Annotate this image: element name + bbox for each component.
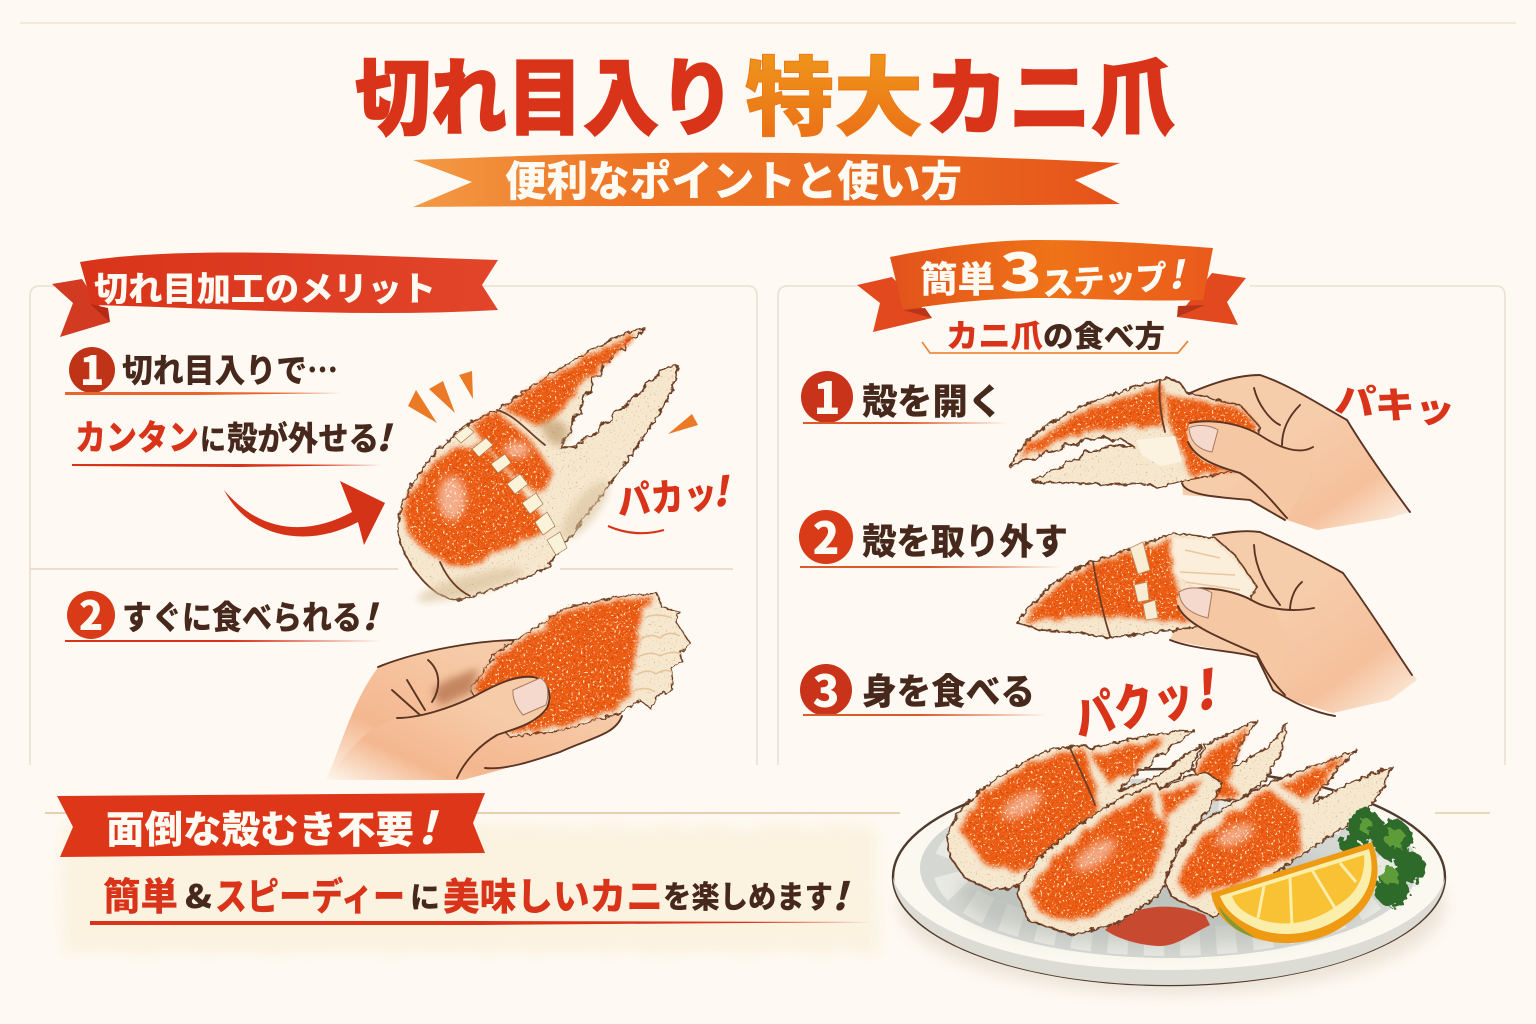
panel: merits — [30, 252, 757, 780]
point 2: すぐに食べられる — [122, 591, 362, 639]
sound effect: pakaa: パカッ — [615, 463, 719, 526]
illustration: removing the shell — [1017, 531, 1417, 716]
illustration: scored crab claw — [397, 328, 677, 608]
heading: steps banner: ステップ — [1041, 251, 1168, 306]
arrow — [224, 481, 385, 545]
icon: burst marks — [408, 371, 698, 434]
step 1 — [801, 363, 1008, 427]
subtitle ribbon: 便利なポイントと使い方 — [505, 148, 962, 209]
banner: no peeling needed: ! — [415, 793, 448, 857]
step 3: 3 — [813, 656, 839, 720]
step 2: 2 — [813, 503, 839, 567]
step 3 — [800, 656, 1048, 720]
step 2 — [799, 503, 1068, 568]
lemon wedge — [1211, 842, 1378, 943]
point 1: 1 — [80, 339, 104, 397]
point 2: ! — [359, 589, 387, 641]
illustration: opening the shell — [1010, 375, 1410, 530]
step 1: 1 — [814, 363, 840, 427]
panel: steps — [778, 231, 1505, 765]
cut marks — [454, 426, 567, 555]
illustration: plate of crab claws — [893, 720, 1445, 993]
point 1: に — [200, 415, 226, 459]
title — [355, 28, 1175, 153]
illustration: hand holding peeled claw — [326, 593, 690, 780]
summary line: 美味しいカニ — [443, 866, 663, 921]
banner: no peeling needed: 面倒な殻むき不要 — [106, 799, 414, 854]
parsley — [1340, 809, 1426, 907]
claw front — [1017, 772, 1222, 935]
summary line: & — [185, 872, 212, 918]
subheading: how to eat: の食べ方 — [1043, 312, 1165, 356]
title: カニ爪 — [925, 32, 1175, 153]
heading: steps banner — [857, 231, 1246, 332]
heading: steps banner: ! — [1166, 244, 1192, 301]
point 1: 切れ目入りで… — [122, 344, 338, 392]
point 2: 2 — [79, 584, 103, 642]
heading: merits banner: 切れ目加工のメリット — [94, 262, 436, 311]
back claw — [1194, 720, 1287, 800]
subheading: how to eat: カニ爪 — [946, 311, 1043, 357]
heading: steps banner: 簡単 — [920, 251, 995, 303]
plate — [893, 769, 1445, 993]
summary line: ! — [829, 867, 858, 922]
claw right — [1165, 750, 1392, 917]
point 1: カンタン — [75, 410, 199, 461]
step 2: 殻を取り外す — [862, 513, 1068, 565]
title: 切れ目入り — [355, 32, 735, 153]
step 3: 身を食べる — [862, 663, 1035, 715]
sound effect: pakaa: ! — [711, 458, 736, 519]
heading: steps banner: 3 — [1000, 231, 1042, 306]
sauce — [1105, 907, 1210, 946]
summary line: を楽しめます — [663, 872, 833, 917]
heading: merits banner — [52, 252, 498, 337]
summary line: 簡単 — [103, 866, 178, 921]
point 2 — [65, 584, 388, 642]
point 1: ! — [373, 410, 401, 462]
sound effect: pakku: パクッ — [1066, 655, 1201, 751]
banner: no peeling needed — [57, 793, 485, 857]
sound effect: pakku: ! — [1196, 646, 1219, 728]
summary line: に — [410, 873, 440, 917]
point 1 — [65, 339, 401, 467]
bottom band — [45, 793, 1490, 953]
title: 特大 — [745, 28, 923, 153]
subheading: how to eat — [922, 311, 1188, 357]
step 1: 殻を開く — [862, 373, 1003, 425]
summary line: スピーディー — [215, 866, 405, 921]
point 1: 殻が外せる — [227, 412, 379, 460]
subtitle ribbon — [413, 148, 1120, 209]
claw left — [947, 730, 1202, 890]
sound effect: pakii: パキッ — [1333, 371, 1458, 435]
summary line — [90, 866, 872, 925]
